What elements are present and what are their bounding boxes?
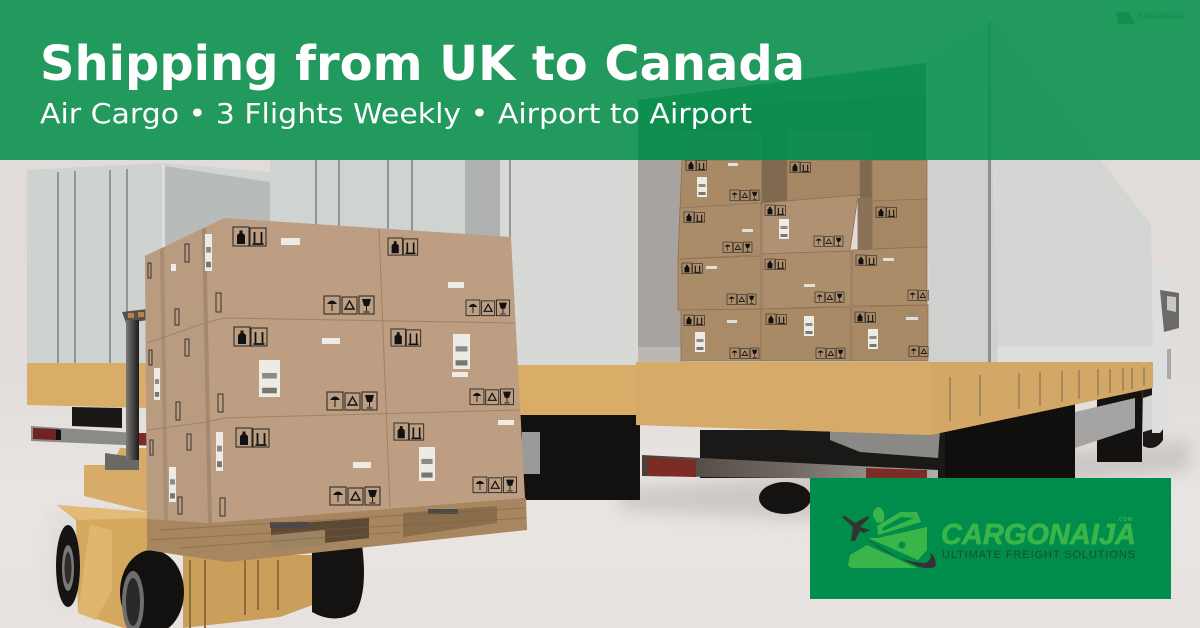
icon: ship and plane logo xyxy=(842,507,936,568)
front truck yellow skirt xyxy=(636,362,1153,435)
cardboard box stack on pallet xyxy=(145,218,525,523)
cargo interior below header xyxy=(638,160,682,362)
logo wordmark: CARGONAIJA xyxy=(941,519,1136,551)
box markings and labels in truck xyxy=(682,160,938,358)
forklift xyxy=(56,309,364,628)
subtitle: Air Cargo • 3 Flights Weekly • Airport to Airport xyxy=(40,97,752,130)
front truck side panel and door xyxy=(927,20,1153,367)
ground shadows xyxy=(50,440,1190,610)
small watermark logo: CARGONAIJA xyxy=(1138,12,1184,21)
logo .com: .COM xyxy=(1117,517,1132,523)
rear truck on left xyxy=(27,163,270,446)
pallet xyxy=(147,498,527,562)
front truck cab xyxy=(1152,263,1179,433)
header band xyxy=(0,0,1200,160)
box shipping symbols xyxy=(148,227,516,516)
logo panel xyxy=(810,478,1171,599)
title: Shipping from UK to Canada xyxy=(40,36,805,92)
front truck chassis and wheels xyxy=(642,380,1167,514)
small watermark logo xyxy=(1116,11,1184,24)
logo tagline: ULTIMATE FREIGHT SOLUTIONS xyxy=(942,549,1135,561)
middle truck xyxy=(270,160,640,500)
white shipping labels on boxes xyxy=(154,234,514,502)
stacked boxes in truck xyxy=(678,160,928,361)
cargo interior seen through header xyxy=(638,63,926,160)
